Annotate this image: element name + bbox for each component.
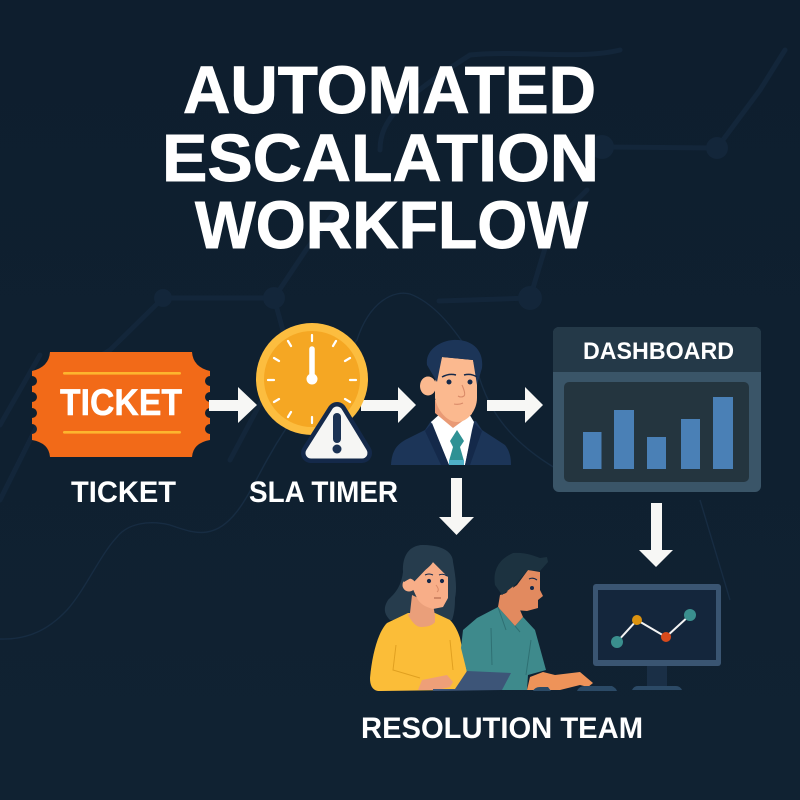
panel: dashboard [553,327,761,492]
woman [370,545,467,691]
label: SLA timer: SLA TIMER [249,476,398,509]
arrow: ticket to timer [209,387,257,423]
heading: dashboard: DASHBOARD [583,338,734,365]
icon: ticket [32,352,210,457]
illustration: resolution team [370,545,617,691]
keyboard [533,686,617,691]
arrow: dashboard to monitor [639,503,673,567]
arrow: timer to manager [361,387,416,423]
arrow: manager to dashboard [487,387,543,423]
icon: manager [391,340,511,465]
man [457,553,593,690]
laptop [433,671,511,691]
icon: warning triangle [311,412,362,454]
label: resolution team: RESOLUTION TEAM [361,712,643,745]
title: AUTOMATED [183,53,596,128]
bar chart [564,382,749,482]
label: ticket: TICKET [71,476,176,509]
title: WORKFLOW [195,188,589,263]
icon: ticket: TICKET [60,382,182,423]
title: ESCALATION [162,121,599,196]
title [162,53,599,263]
icon: SLA timer clock [256,323,368,435]
icon: monitor with line chart [593,584,721,690]
arrow: manager to team [439,478,474,535]
